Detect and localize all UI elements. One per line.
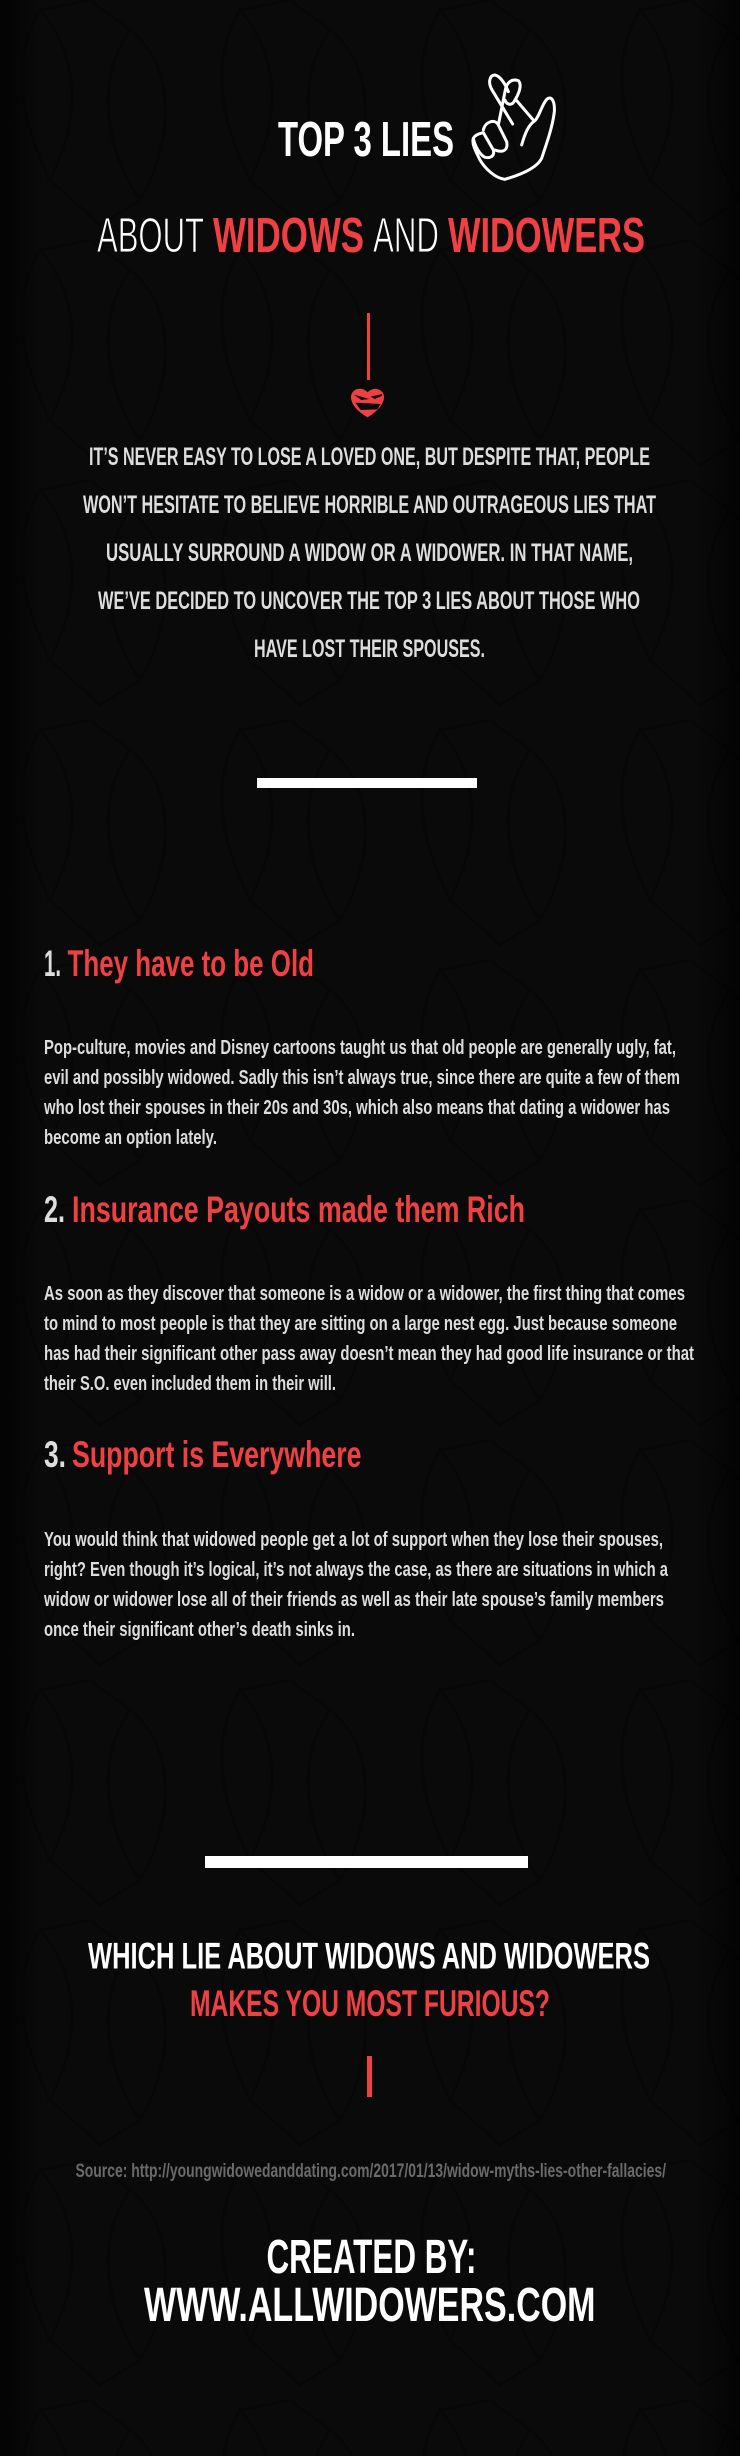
credit (144, 2230, 596, 2332)
heading: lie 3: 3. (44, 1434, 66, 1475)
heading: lie 2: Insurance Payouts made them Rich (72, 1189, 525, 1230)
closing question: MAKES YOU MOST FURIOUS? (190, 1983, 550, 2024)
heading: lie 1: They have to be Old (68, 943, 314, 984)
title: about widows and widowers: AND (373, 209, 439, 263)
closing question (88, 1936, 650, 2024)
icon: crossed fingers hand (473, 75, 554, 179)
divider bar top (257, 778, 477, 788)
title: about widows and widowers: ABOUT (97, 209, 204, 263)
heading: lie 1: 1. (44, 943, 61, 984)
heading: lie 3: Support is Everywhere (72, 1434, 362, 1475)
red vertical line (367, 313, 370, 380)
title: about widows and widowers (97, 209, 645, 263)
icon: bandaged heart (351, 389, 384, 417)
text: lie 2 body (44, 1283, 694, 1395)
title: about widows and widowers: WIDOWS (213, 209, 364, 263)
divider bar bottom (205, 1856, 528, 1868)
intro text (83, 443, 656, 663)
heading: lie 3 (44, 1434, 362, 1475)
text: lie 1 body: become an option lately. (44, 1127, 217, 1149)
red tick (367, 2056, 372, 2097)
title: top 3 lies: TOP 3 LIES (278, 113, 454, 167)
heading: lie 2: 2. (44, 1189, 65, 1230)
heading: lie 1 (44, 943, 314, 984)
title: about widows and widowers: WIDOWERS (448, 209, 645, 263)
credit: CREATED BY: (266, 2230, 476, 2284)
text: lie 2 body: their S.O. even included them in their will. (44, 1373, 336, 1395)
text: lie 3 body: once their significant other’s death sinks in. (44, 1619, 355, 1641)
heading: lie 2 (44, 1189, 525, 1230)
intro text: HAVE LOST THEIR SPOUSES. (254, 635, 485, 663)
text: lie 3 body (43, 1529, 669, 1641)
text: lie 1 body (43, 1037, 680, 1149)
